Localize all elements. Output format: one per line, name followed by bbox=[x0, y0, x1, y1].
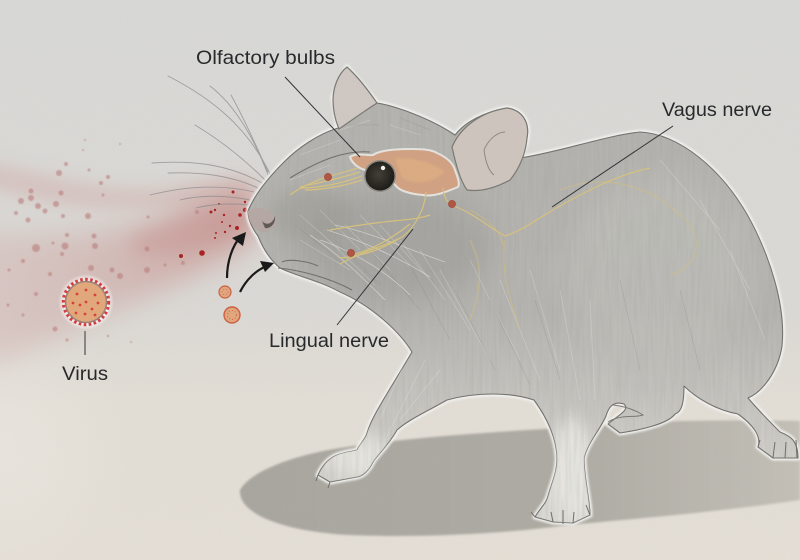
virus outer coat bbox=[66, 282, 106, 322]
particles: bright red droplets bbox=[179, 190, 272, 258]
eye highlight bbox=[381, 166, 385, 170]
ear right bbox=[452, 108, 528, 191]
brain highlight bbox=[395, 158, 445, 182]
cheek white whiskers bbox=[310, 225, 445, 300]
leader: olfactory bulbs bbox=[285, 77, 360, 157]
forehead bump and cheek line bbox=[278, 152, 370, 290]
plume: main cone bbox=[0, 190, 256, 372]
eye bbox=[364, 160, 396, 192]
particles: faded bbox=[6, 139, 199, 343]
arrow to nose bbox=[227, 232, 246, 278]
raised hind foot outline bbox=[608, 405, 643, 422]
hair texture bbox=[330, 360, 784, 522]
virus leader line bbox=[84, 331, 86, 355]
paw claws bbox=[316, 440, 797, 524]
left paw light bbox=[321, 433, 389, 477]
leader: vagus nerve bbox=[552, 126, 673, 207]
virus glow bbox=[58, 274, 114, 330]
plume: core bbox=[130, 192, 254, 256]
virus spikes ring bbox=[64, 280, 108, 324]
label: Olfactory bulbs: Olfactory bulbs bbox=[196, 48, 335, 69]
lower back light bbox=[590, 193, 765, 310]
brain: olfactory bulbs bbox=[350, 149, 459, 195]
virus bbox=[58, 274, 114, 330]
nerves bbox=[290, 168, 696, 330]
dark fur strokes bbox=[295, 118, 700, 385]
nose bbox=[248, 208, 276, 232]
mouse bbox=[240, 60, 800, 530]
label: Vagus nerve: Vagus nerve bbox=[662, 100, 772, 121]
faint spine nerves bbox=[470, 182, 696, 330]
label: Virus: Virus bbox=[62, 364, 108, 385]
leader: lingual nerve bbox=[337, 229, 413, 325]
label: Lingual nerve: Lingual nerve bbox=[269, 331, 389, 352]
light fur strokes bbox=[290, 120, 765, 440]
virus plume bbox=[0, 139, 272, 372]
ear left bbox=[333, 67, 377, 129]
lingual nerve bbox=[330, 192, 430, 264]
plume: upper wisp bbox=[0, 160, 250, 209]
eye ball bbox=[366, 162, 394, 190]
whiskers bbox=[150, 76, 272, 208]
receptor dots bbox=[324, 173, 456, 257]
vagus nerve bbox=[443, 168, 650, 236]
ear right inner fold bbox=[484, 132, 505, 175]
muzzle shade bbox=[272, 189, 342, 239]
small particle 1 bbox=[219, 286, 231, 298]
virus dots bbox=[72, 289, 99, 316]
small particle 2 bbox=[224, 307, 240, 323]
brain outline bbox=[350, 149, 459, 195]
eye ring bbox=[364, 160, 396, 192]
left light patch bbox=[0, 330, 220, 560]
mouse halo bbox=[248, 67, 798, 523]
cheek and neck shade bbox=[300, 190, 490, 300]
foreleg light bbox=[548, 418, 596, 522]
ground shadow bbox=[240, 420, 800, 536]
mouse shading bbox=[268, 118, 784, 523]
arrow to mouth bbox=[240, 261, 274, 292]
nostril bbox=[262, 216, 275, 228]
olfactory nerves bbox=[290, 168, 362, 195]
mouse body bbox=[248, 103, 798, 523]
